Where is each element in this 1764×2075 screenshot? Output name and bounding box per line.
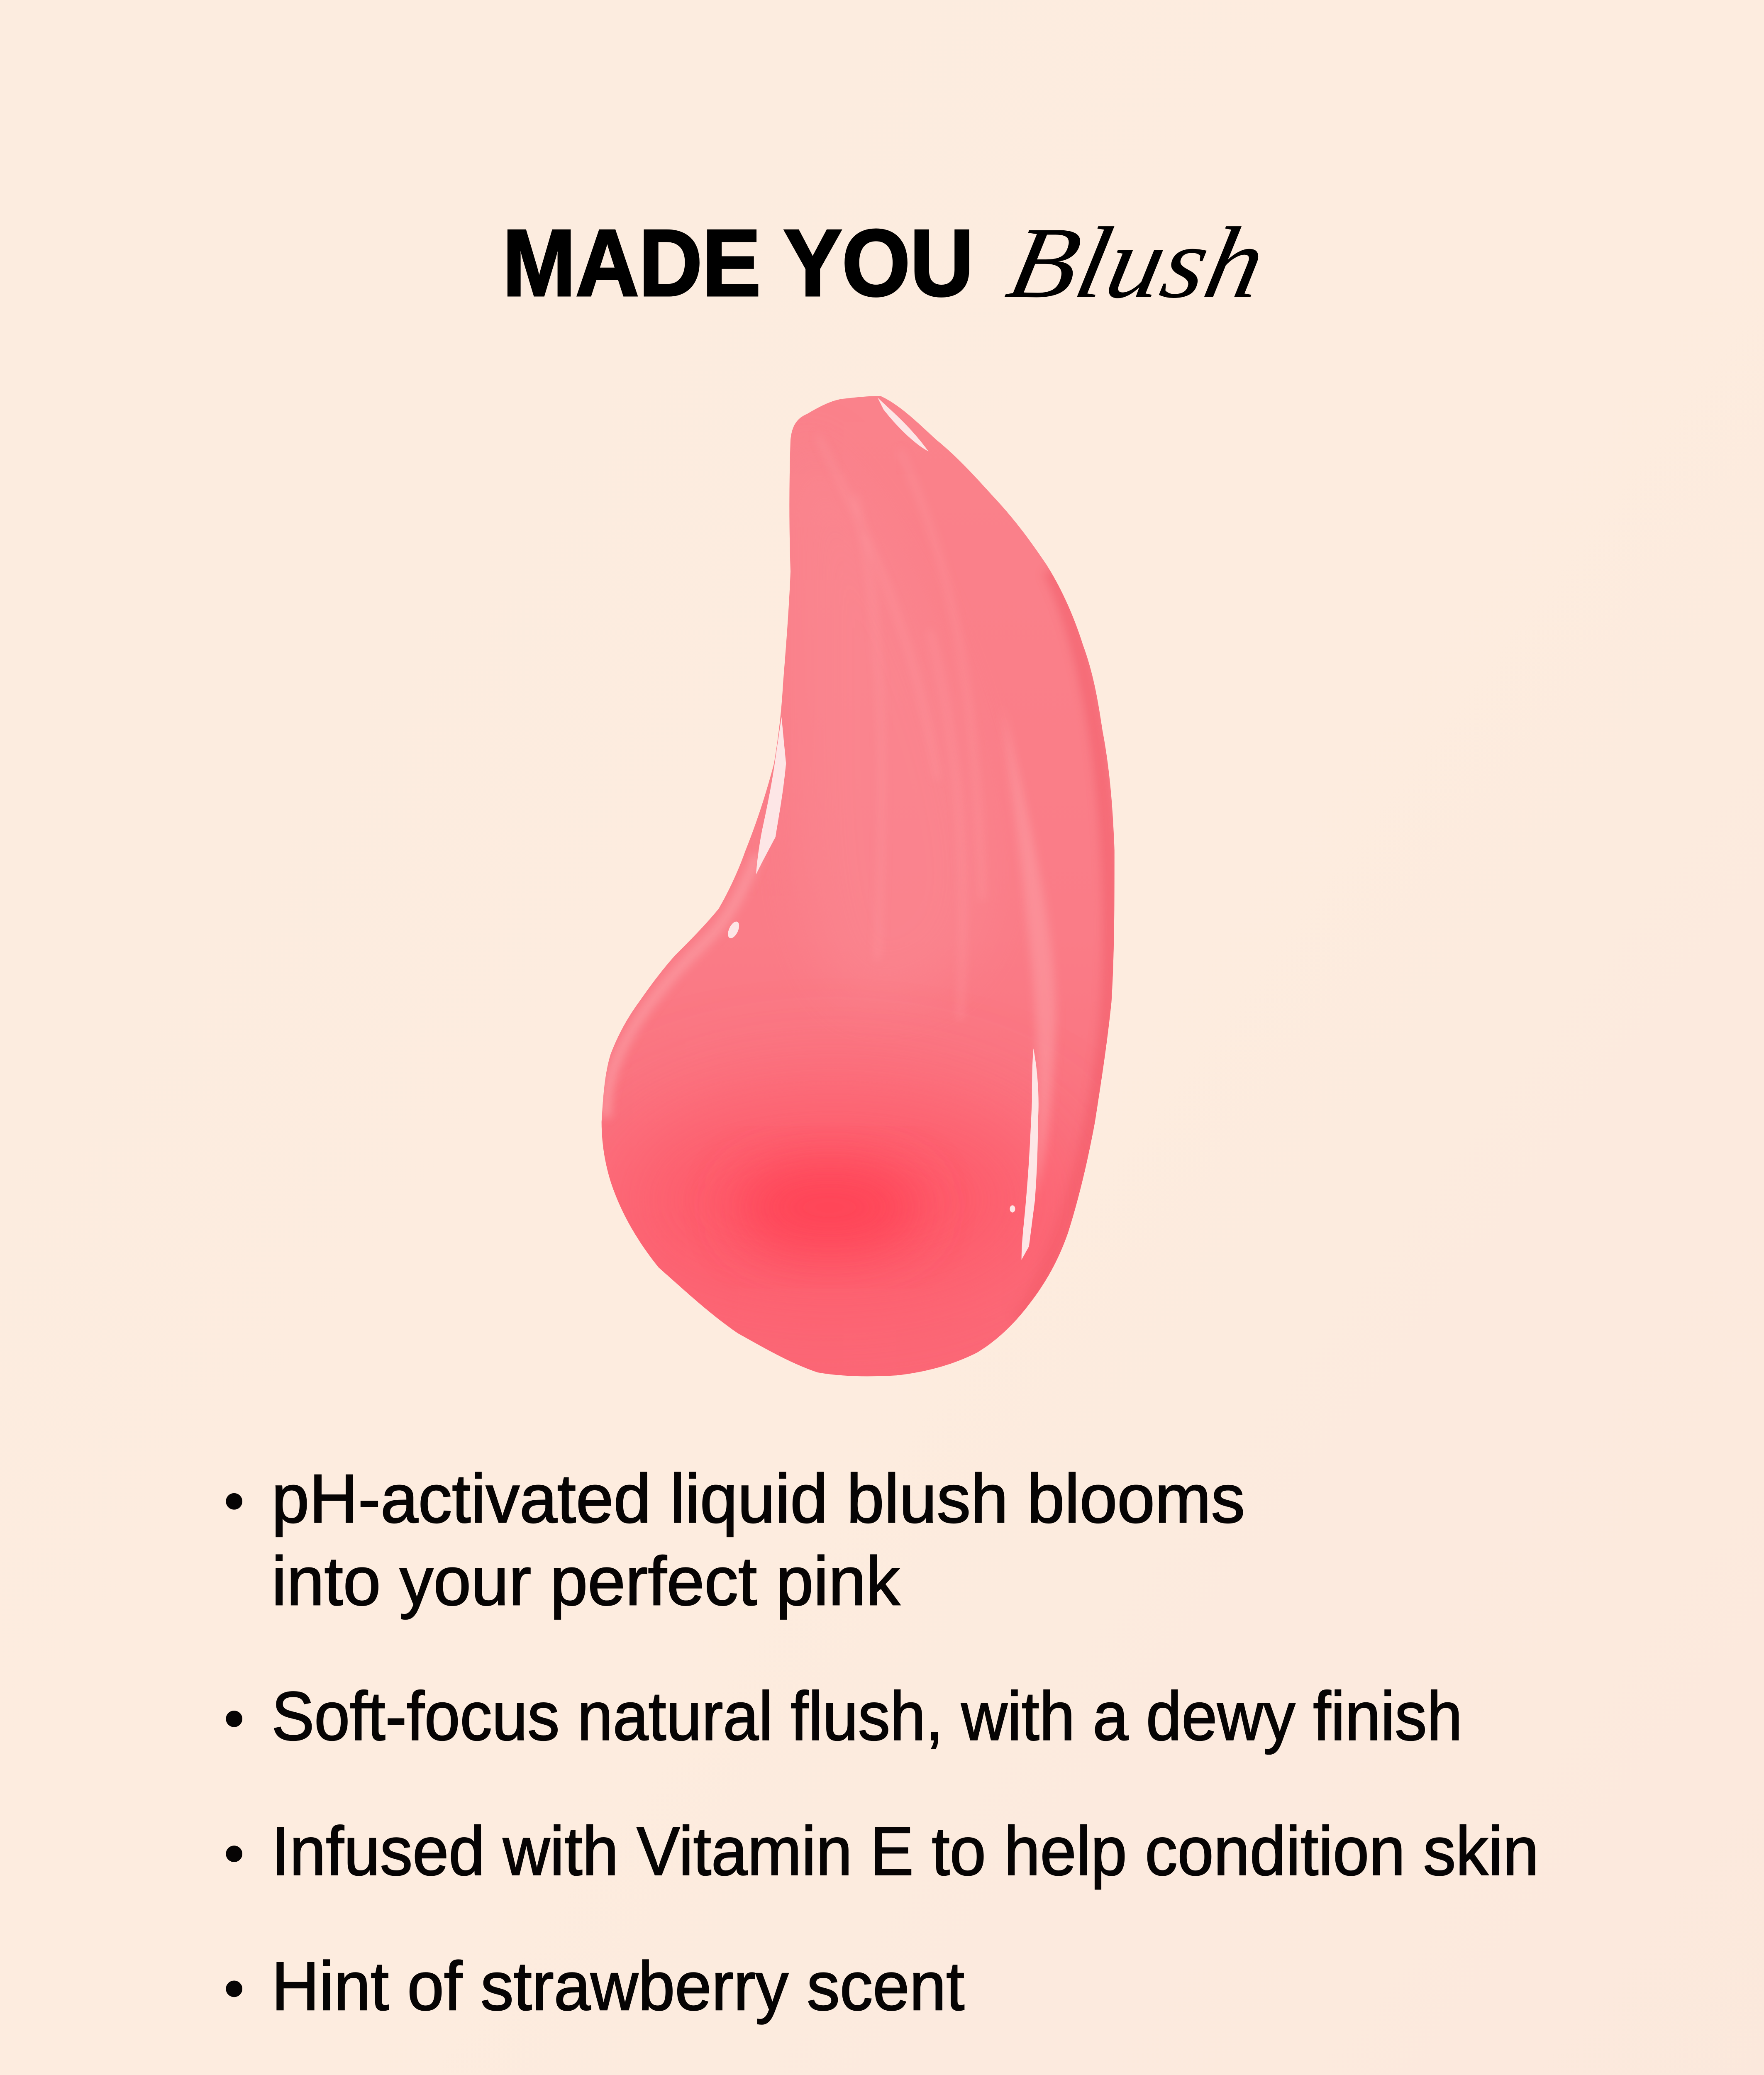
brush streaks <box>817 435 983 1020</box>
bullet 2: Soft-focus natural flush, with a dewy finish <box>272 1677 1462 1755</box>
swatch body <box>602 396 1115 1376</box>
bullet 1 <box>226 1460 1245 1620</box>
heading: Blush script: Blush <box>999 206 1275 319</box>
bullet 3: Infused with Vitamin E to help condition skin <box>272 1813 1539 1890</box>
tiny gloss dots <box>1010 1205 1015 1213</box>
top gloss streak <box>878 398 929 452</box>
right gloss streak <box>1022 1048 1039 1260</box>
left gloss streak <box>756 717 786 874</box>
product swatch: pink blush smear <box>602 396 1115 1376</box>
swatch shading and highlights <box>606 435 1110 1320</box>
bullet list <box>226 1460 1539 2075</box>
right edge darker band <box>1020 570 1110 1320</box>
glossy right ribbon <box>1002 705 1056 1200</box>
deep pink bloom, wide <box>608 1095 1057 1305</box>
lighter lower-left rim <box>606 855 758 1118</box>
deep pink bloom, centre <box>737 1162 922 1252</box>
heading: MADE YOU: MADE YOU <box>503 210 973 316</box>
title <box>503 206 1275 319</box>
gloss highlights <box>726 398 1039 1260</box>
bullet 1: into your perfect pink <box>272 1543 900 1620</box>
bullet 4: Hint of strawberry scent <box>272 1948 964 2025</box>
lighter upper sheen <box>795 435 993 1005</box>
bullet 1: pH-activated liquid blush blooms <box>272 1460 1245 1537</box>
small gloss drop <box>726 920 742 940</box>
